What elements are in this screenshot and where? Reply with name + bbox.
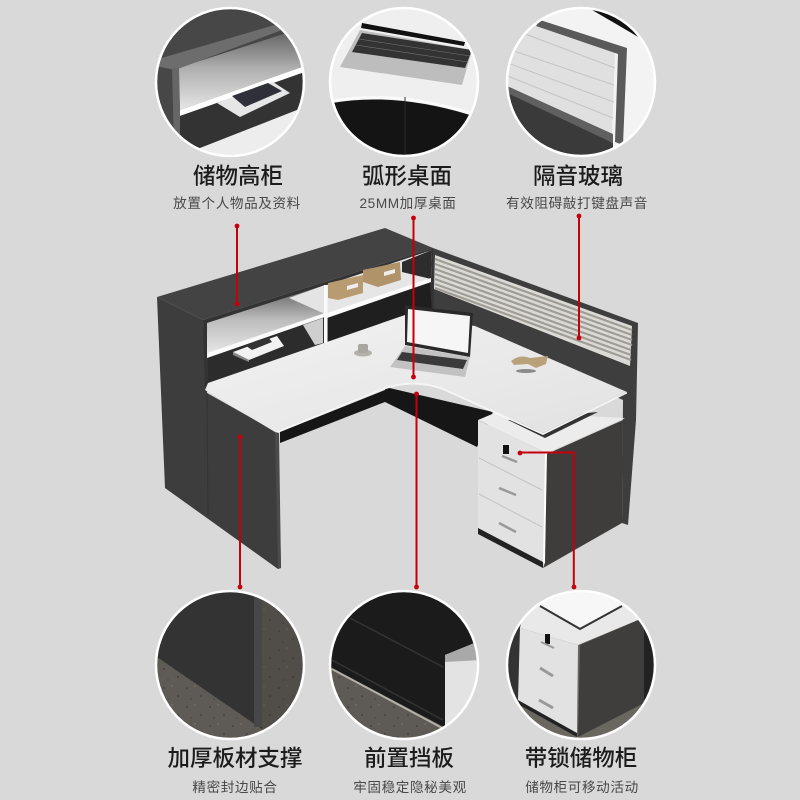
detail circle: board: [329, 590, 482, 740]
panel: curved desktop: [329, 7, 480, 211]
text: pedestal: 储物柜可移动活动: [525, 780, 639, 795]
callout: pedestal line: [518, 451, 576, 589]
callout: storage hutch line: [235, 224, 239, 306]
heading: board: 前置挡板: [364, 746, 454, 771]
detail circle: pedestal: [506, 590, 656, 740]
panel: storage hutch: [155, 7, 305, 211]
hutch top: [157, 228, 433, 320]
heading: glass: 隔音玻璃: [533, 164, 623, 189]
panel: front modesty board: [329, 590, 482, 795]
desk illustration: [157, 228, 638, 569]
books: [233, 336, 284, 362]
panel seam: [207, 393, 208, 515]
mug: [354, 344, 372, 356]
heading: desktop: 弧形桌面: [362, 164, 452, 189]
pedestal dark side: [543, 420, 623, 568]
storage boxes: [328, 262, 401, 300]
detail circle: desktop: [329, 7, 480, 160]
figurine: [511, 356, 548, 373]
callout: side panel line: [238, 435, 242, 589]
text: board: 牢固稳定隐秘美观: [353, 780, 467, 795]
panel: locking pedestal: [506, 590, 656, 795]
hutch compartments: [203, 248, 434, 392]
detail circle: glass: [505, 7, 656, 160]
callout: curved desktop line: [411, 216, 416, 379]
partition panel with slatted glass: [433, 248, 638, 525]
left side panel: [157, 297, 281, 569]
callout: glass line: [577, 214, 581, 340]
text: glass: 有效阻碍敲打键盘声音: [506, 195, 648, 211]
pedestal drawers: [478, 420, 547, 568]
heading: support: 加厚板材支撑: [167, 746, 303, 771]
mobile pedestal tray: [478, 412, 625, 453]
L-shaped desk aprons: [280, 387, 493, 447]
callout: modesty panel line: [414, 392, 419, 589]
heading: hutch: 储物高柜: [193, 164, 283, 189]
heading: pedestal: 带锁储物柜: [525, 746, 637, 771]
detail circle: support: [155, 590, 306, 740]
panel: glass: [505, 7, 656, 211]
text: desktop: 25MM加厚桌面: [360, 196, 456, 211]
panel: side support: [155, 590, 306, 795]
text: support: 精密封边贴合: [192, 779, 278, 795]
text: hutch: 放置个人物品及资料: [173, 196, 301, 211]
desktop: [205, 315, 627, 438]
detail circle: hutch: [155, 7, 305, 157]
panel front edge: [275, 432, 281, 568]
laptop: [390, 305, 473, 377]
